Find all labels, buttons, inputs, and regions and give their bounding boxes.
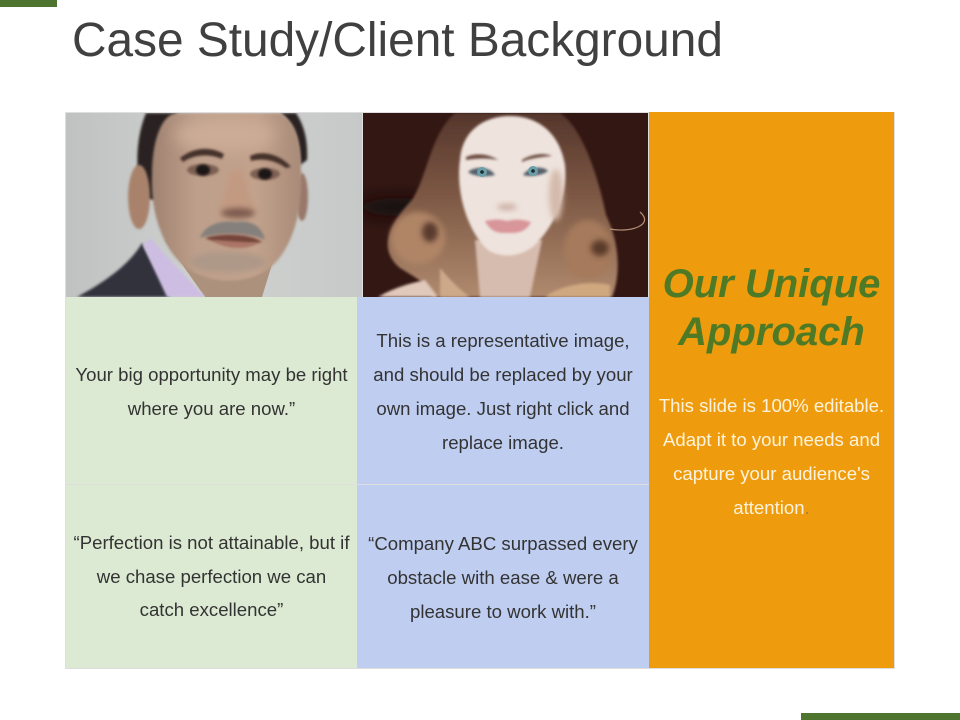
- quote text: catch excellence”: [140, 599, 283, 620]
- collar: [143, 238, 205, 297]
- body text: [373, 330, 633, 453]
- panel: woman portrait: [363, 113, 648, 297]
- heading: Approach: [678, 310, 865, 354]
- body text: This slide is 100% editable.: [659, 395, 884, 416]
- quote text: we chase perfection we can: [97, 566, 326, 587]
- body text: replace image.: [442, 432, 564, 453]
- forehead highlight: [175, 119, 275, 151]
- neck: [165, 240, 278, 297]
- quote text: where you are now.”: [128, 398, 295, 419]
- panel: green quote bottom: [66, 485, 357, 668]
- quote text: Your big opportunity may be right: [75, 364, 348, 385]
- mouth: [205, 235, 262, 244]
- heading: Our Unique: [663, 262, 880, 306]
- curls: [391, 212, 445, 264]
- hair: [137, 113, 307, 200]
- quote text: [75, 364, 348, 419]
- panel: green quote top: [66, 297, 357, 484]
- panel: man portrait: [66, 113, 362, 297]
- body text: and should be replaced by your: [373, 364, 633, 385]
- body text: attention.: [733, 497, 810, 518]
- body text: This is a representative image,: [376, 330, 630, 351]
- top accent bar: [0, 0, 57, 7]
- shoulder: [378, 280, 438, 297]
- body text: Adapt it to your needs and: [663, 429, 880, 450]
- panel: blue text top: [357, 297, 649, 484]
- face: [459, 116, 565, 255]
- quote text: [74, 532, 350, 620]
- quote text: “Company ABC surpassed every: [368, 533, 638, 554]
- brows: [466, 154, 498, 160]
- cheek shadow: [549, 169, 563, 221]
- brows: [180, 149, 224, 162]
- quote text: obstacle with ease & were a: [387, 567, 619, 588]
- nose shadow: [497, 204, 517, 210]
- table outline: [65, 112, 895, 669]
- moustache: [200, 222, 265, 240]
- neck: [475, 240, 542, 297]
- title: Case Study/Client Background: [72, 14, 723, 67]
- eyes: [468, 168, 495, 176]
- heading: [663, 262, 880, 354]
- body text: own image. Just right click and: [376, 398, 630, 419]
- lips: [485, 220, 531, 233]
- ears: [128, 165, 150, 229]
- quote text: [368, 533, 638, 622]
- hair: [388, 113, 618, 297]
- body text: [659, 395, 884, 518]
- panel: orange approach: [649, 112, 894, 668]
- quote text: pleasure to work with.”: [410, 601, 596, 622]
- eyes: [187, 164, 219, 176]
- quote text: “Perfection is not attainable, but if: [74, 532, 349, 553]
- panel: blue quote bottom: [357, 485, 649, 668]
- chin shadow: [190, 252, 266, 272]
- suit: [77, 243, 170, 297]
- body text: capture your audience's: [673, 463, 870, 484]
- face: [152, 113, 301, 281]
- bottom accent bar: [801, 713, 960, 720]
- nose: [218, 170, 256, 219]
